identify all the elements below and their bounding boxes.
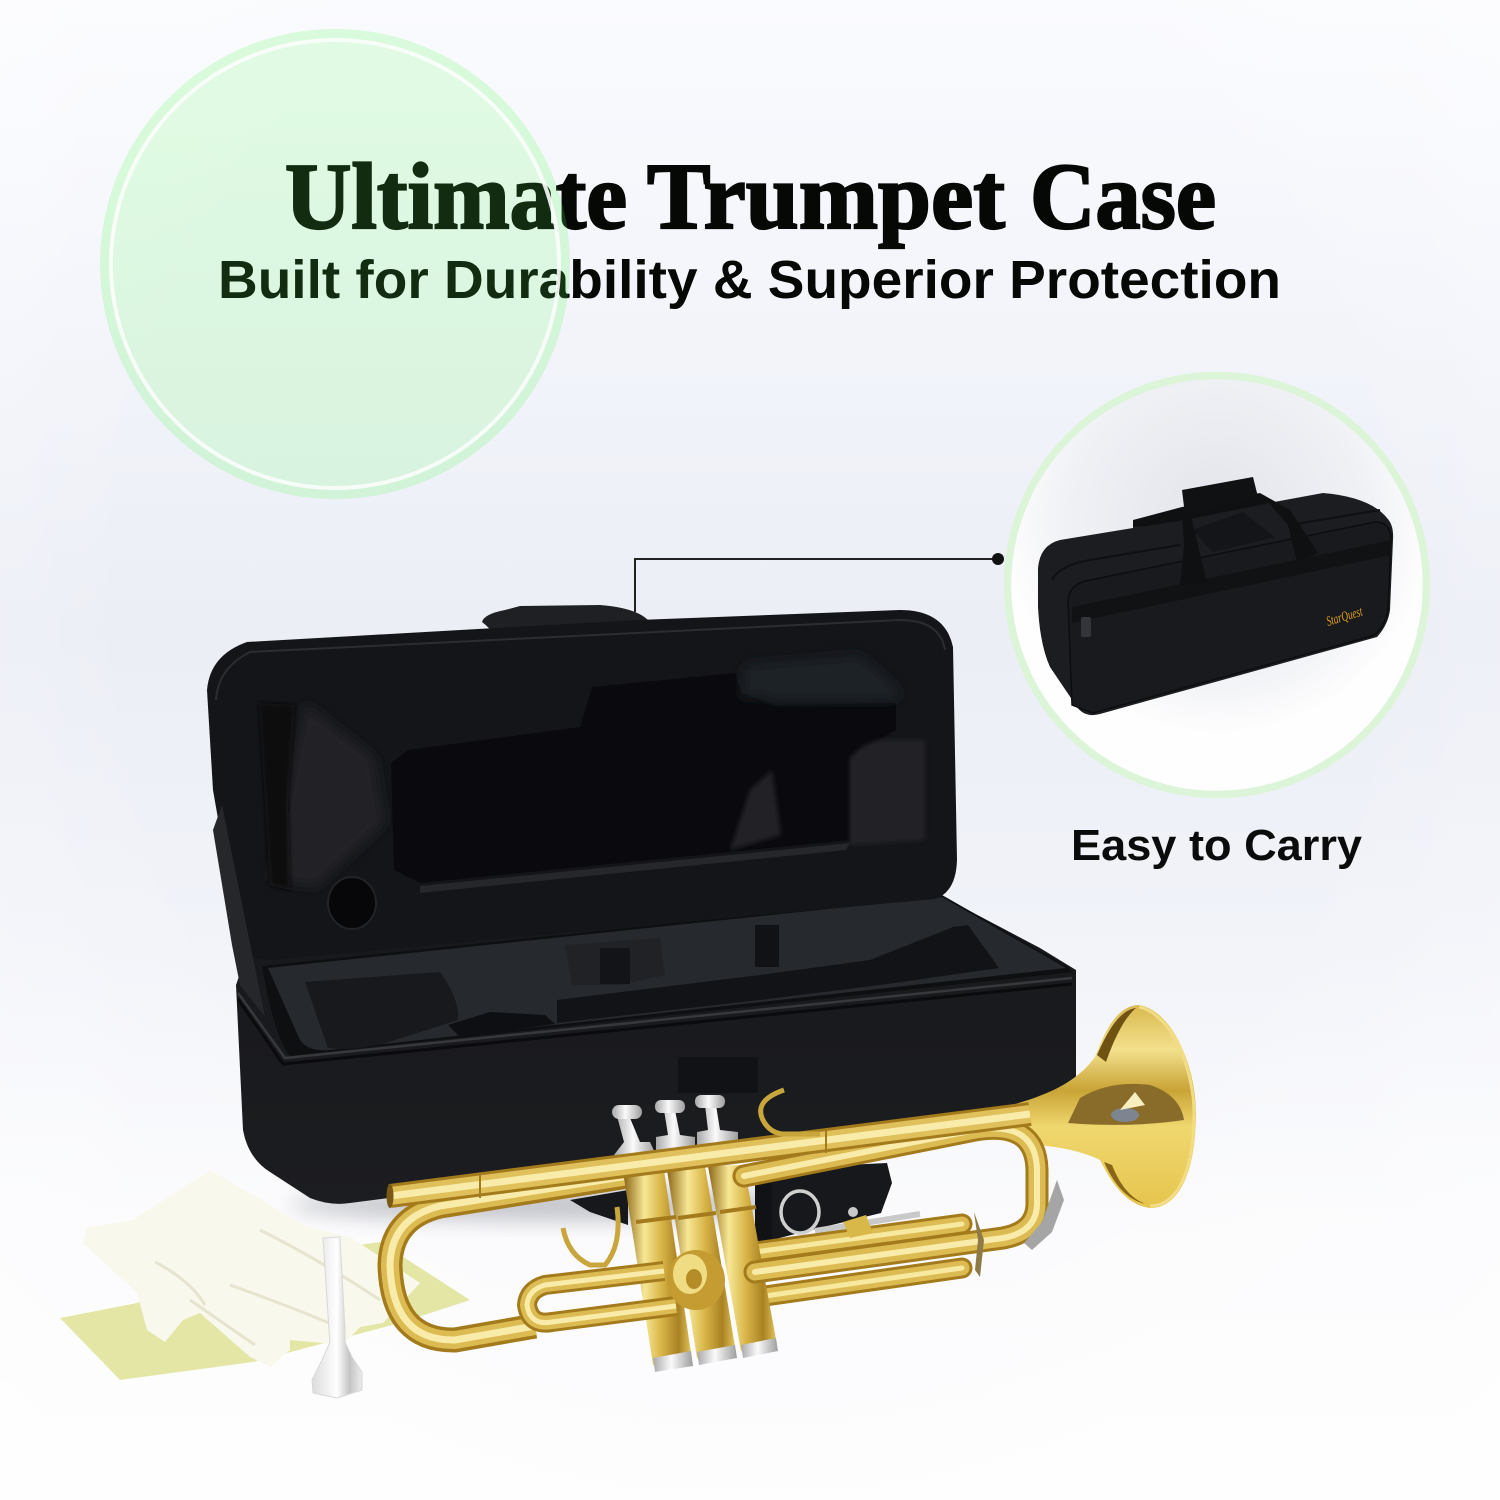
- inset caption: Easy to Carry: [1071, 821, 1363, 870]
- lead pipe: [386, 1114, 1030, 1208]
- callout leader line: [635, 553, 1004, 612]
- zipper pull: [1081, 617, 1091, 637]
- front panel: [1068, 522, 1391, 713]
- case lower shell: [236, 890, 1076, 1204]
- gloves and cleaning cloth: [60, 1170, 470, 1380]
- bell reflection: [1068, 1084, 1184, 1125]
- zipper rim: [238, 978, 1072, 1058]
- title: [285, 145, 1216, 249]
- logo: StarQuest: [1325, 604, 1365, 630]
- valve caps: [653, 1338, 778, 1372]
- tuning slide loop: [744, 1128, 1037, 1272]
- slide brace: [843, 1215, 873, 1238]
- subtitle: Built for Durability & Superior Protection: [218, 250, 1281, 310]
- white gloves: [83, 1170, 420, 1367]
- hinge flap: [213, 805, 265, 1017]
- lid inner velvet: [225, 628, 944, 948]
- lower cavity: [305, 972, 458, 1049]
- title: Ultimate: [285, 145, 627, 249]
- main tube: [390, 1176, 628, 1340]
- handle pad: [1182, 477, 1258, 507]
- ring and stick: [781, 1191, 819, 1233]
- title: Trumpet: [647, 145, 1005, 249]
- large green decorative circle: [100, 29, 570, 499]
- title: Case: [1030, 145, 1216, 249]
- back strap: [1133, 493, 1270, 528]
- case lid: [207, 610, 957, 960]
- front logo patch: [678, 1057, 758, 1093]
- water keys: [974, 1180, 1064, 1277]
- valve tops: [612, 1095, 738, 1155]
- third valve slide: [527, 1271, 676, 1323]
- case shadow: [290, 1189, 830, 1221]
- open trumpet case: [207, 605, 1076, 1221]
- lid pocket hole: [328, 877, 376, 929]
- strap inside case: [557, 925, 999, 1023]
- closed case body: [1038, 493, 1393, 715]
- lid recess: [391, 673, 896, 883]
- lower interior: [262, 895, 1073, 1056]
- bell: [1000, 1005, 1196, 1208]
- finger hook: [761, 1090, 820, 1134]
- flap: [1196, 512, 1272, 551]
- trumpet: [386, 1005, 1196, 1372]
- third valve ring: [563, 1207, 618, 1265]
- bell rim: [1139, 1007, 1194, 1206]
- case handle behind lid: [482, 605, 648, 636]
- cleaning cloth: [60, 1242, 470, 1380]
- valve casings: [624, 1165, 777, 1365]
- handle straps: [1180, 519, 1206, 584]
- mouthpiece: [312, 1237, 362, 1398]
- valve bow: [667, 1250, 725, 1310]
- black strap behind trumpet: [744, 1163, 892, 1240]
- zipper band: [1072, 540, 1391, 623]
- inset photo: closed case: [1008, 376, 1426, 794]
- valve slide tubes: [755, 1224, 962, 1296]
- lid velvet highlights: [270, 703, 385, 887]
